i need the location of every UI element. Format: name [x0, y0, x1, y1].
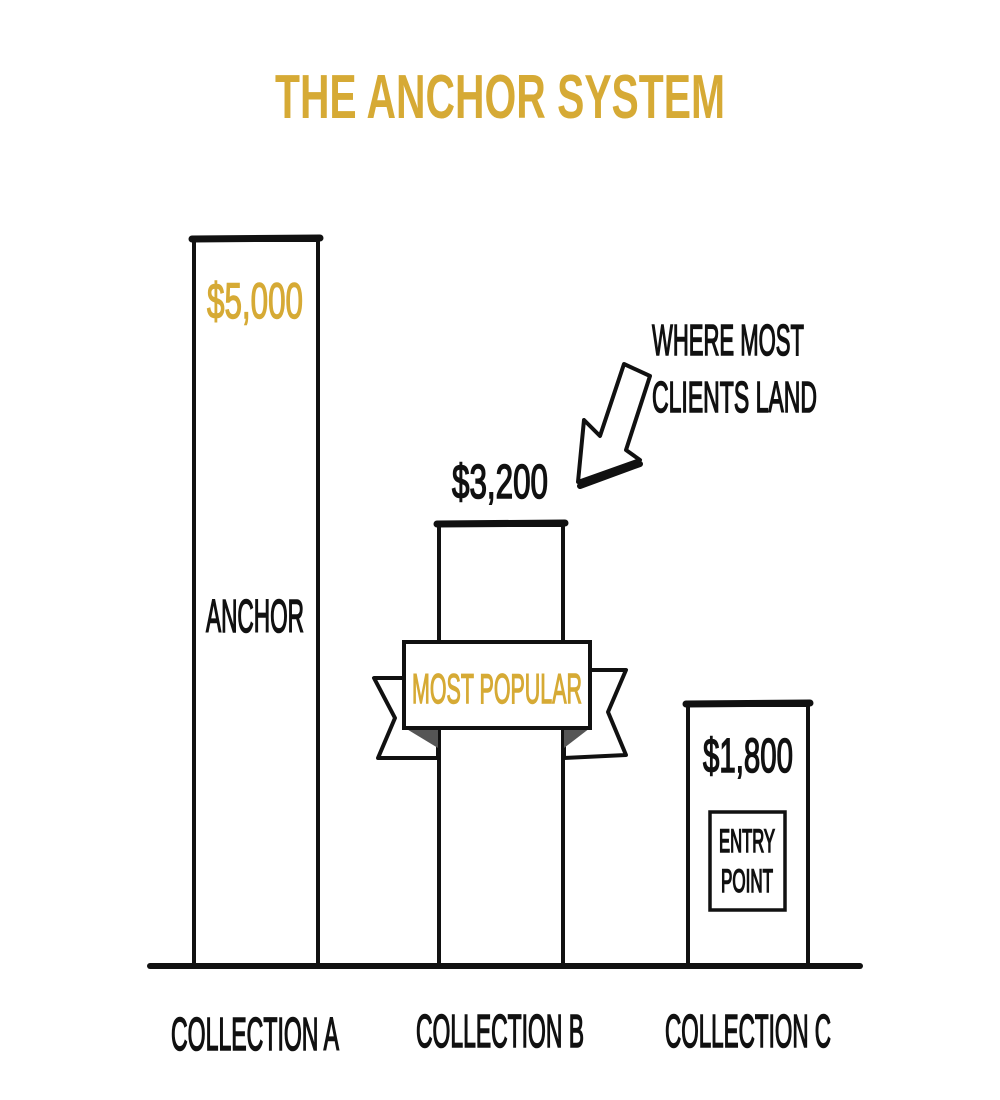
callout: where most clients land [652, 316, 817, 422]
entry point box: ENTRY [719, 823, 775, 859]
ribbon: most popular: MOST POPULAR [412, 665, 582, 712]
bar: collection A: ANCHOR [206, 590, 304, 642]
price C: $1,800 [703, 730, 793, 783]
entry point box [710, 812, 785, 910]
title: THE ANCHOR SYSTEM [275, 63, 725, 132]
text: COLLECTION C [665, 1005, 831, 1057]
bar: collection C [686, 703, 810, 966]
callout: where most clients land: CLIENTS LAND [652, 373, 817, 422]
arrow: pointing to collection B [578, 364, 650, 486]
label: collection A: COLLECTION A [171, 1008, 339, 1060]
bar: collection B [437, 456, 565, 966]
baseline [150, 963, 860, 969]
price B: $3,200 [452, 456, 548, 509]
callout: where most clients land: WHERE MOST [652, 316, 804, 365]
ribbon: most popular [374, 642, 626, 758]
entry point box: POINT [721, 863, 773, 899]
price A: $5,000 [207, 273, 303, 329]
bar: collection A [192, 238, 320, 966]
text: COLLECTION B [416, 1005, 584, 1057]
